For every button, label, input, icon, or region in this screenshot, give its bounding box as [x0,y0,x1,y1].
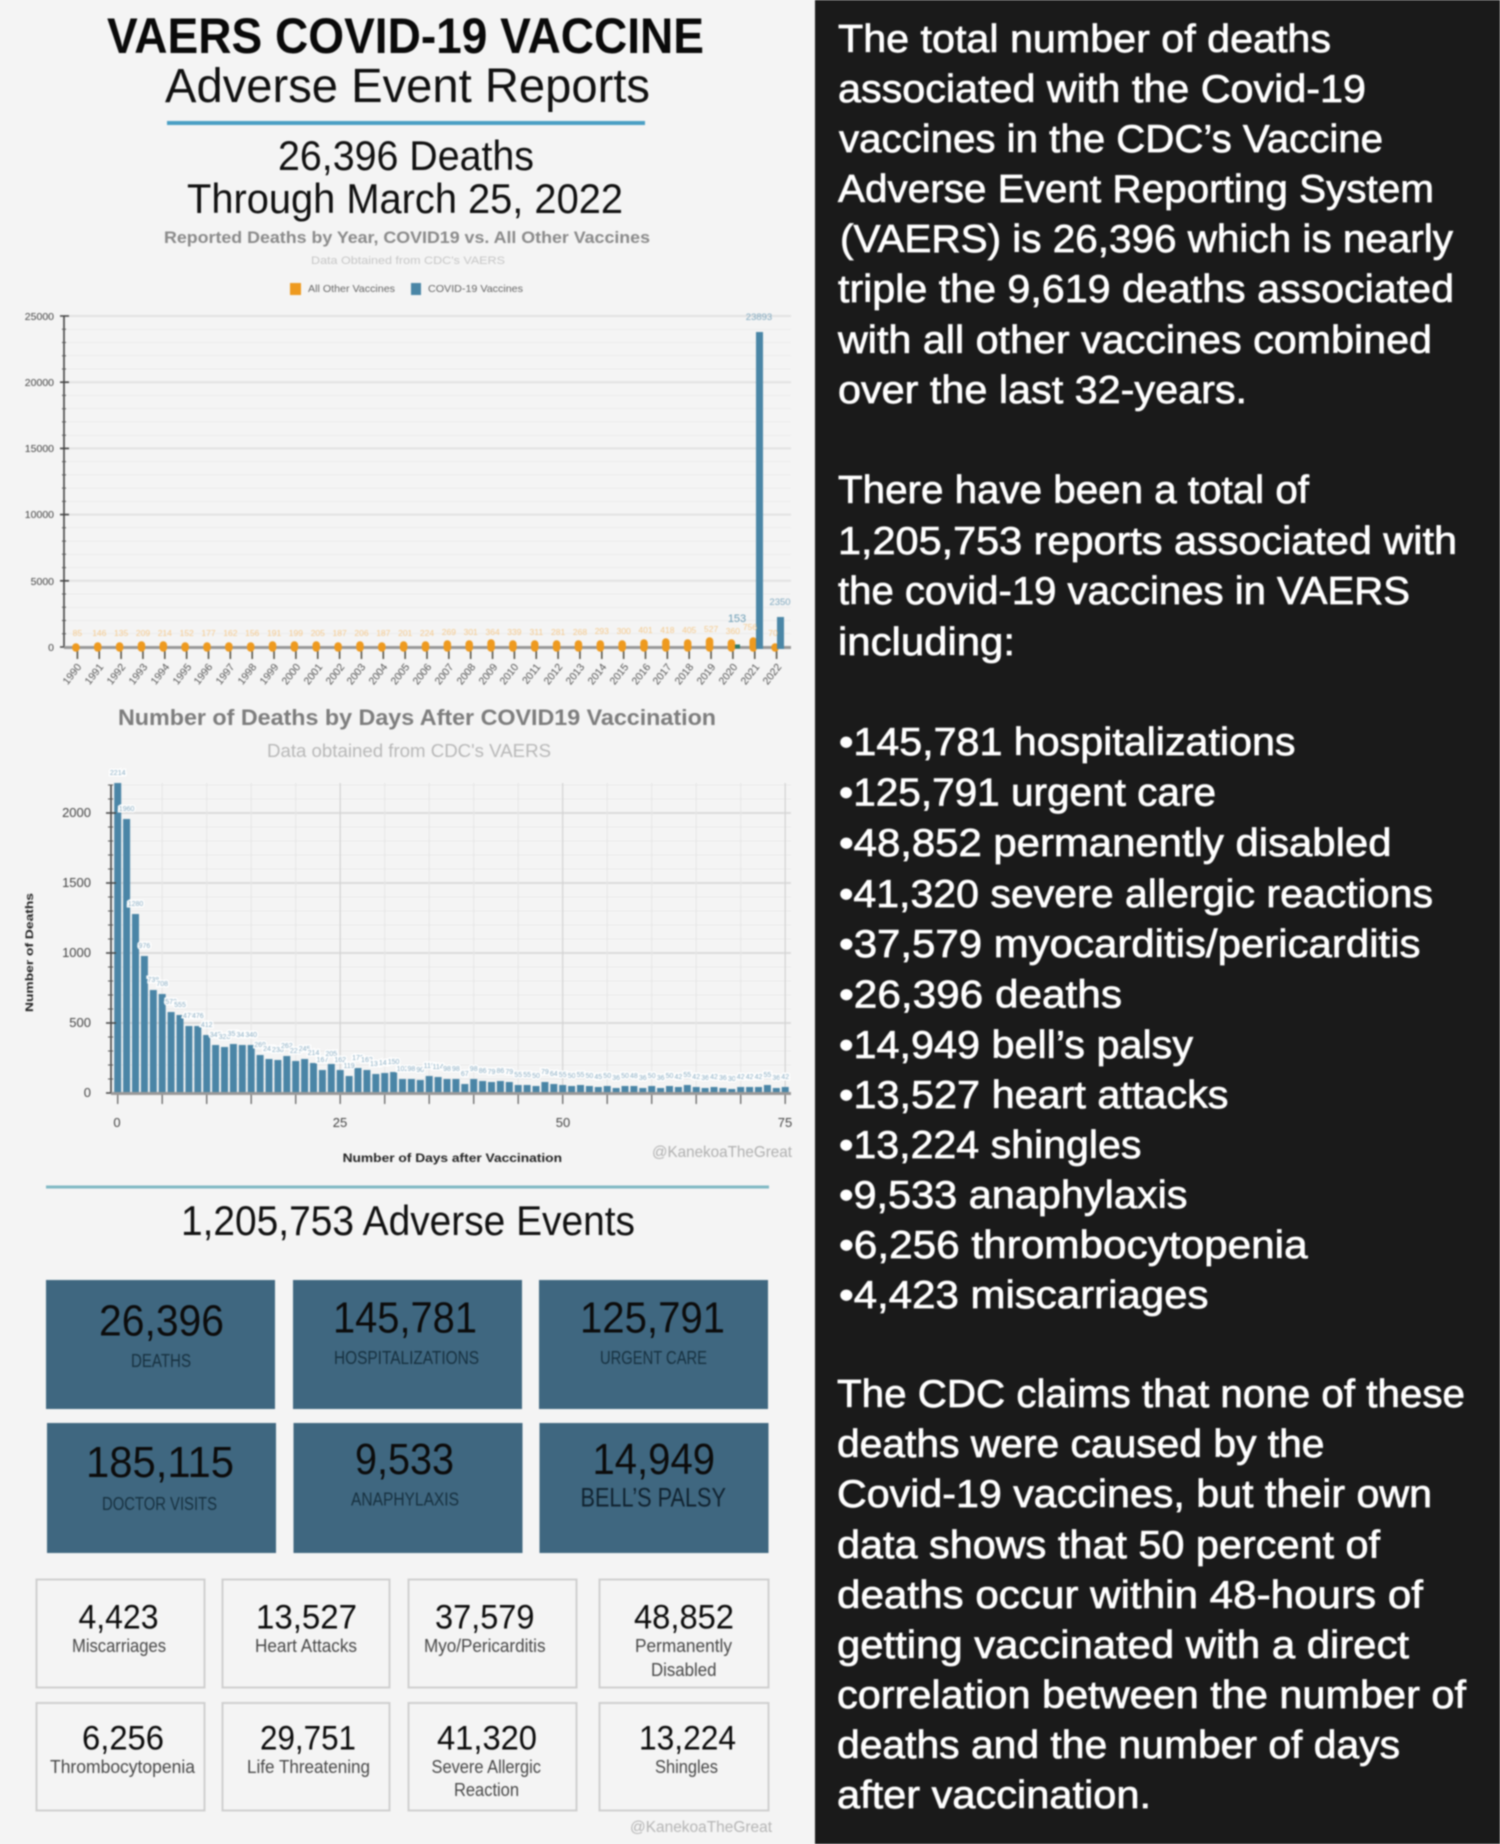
bar value labels: 162 [223,628,238,638]
tile: hospitalizations: 145,781 [333,1294,477,1342]
bar value labels: 85 [73,628,82,638]
chart: reported deaths by year [25,229,791,687]
text block: CDC claims: deaths and the number of days [837,1724,1400,1767]
text block: total deaths: The total number of deaths [838,18,1331,61]
bar value labels: 179 [352,1055,364,1062]
list: adverse event counts: •41,320 severe allergic reactions [839,873,1433,916]
bar value labels: 201 [398,628,413,638]
box: myo/pericarditis: 37,579 [435,1598,534,1636]
box: shingles: Shingles [655,1757,718,1777]
bar value labels: 162 [361,1057,373,1064]
x axis year labels: 2017 [651,661,674,687]
title rule [167,121,645,125]
x axis year labels: 2016 [630,661,653,687]
list: adverse event counts: •9,533 anaphylaxis [839,1174,1188,1217]
list: adverse event counts: •125,791 urgent care [839,772,1216,814]
bar value labels: 42 [746,1074,754,1081]
legend: COVID-19 Vaccines [428,283,523,295]
x axis year labels: 1991 [83,661,106,687]
bar value labels: 42 [710,1074,718,1081]
bars: all other vaccines [76,641,775,648]
bar value labels: 36 [772,1075,780,1082]
bar value labels: 205 [311,628,325,638]
text block: total reports: including: [838,621,1015,664]
x axis year labels: 1995 [171,661,194,687]
y axis: 20000 [25,377,54,389]
bar value labels: 114 [433,1064,444,1071]
box: myo/pericarditis: Myo/Pericarditis [424,1636,546,1656]
chart heading [118,705,716,761]
bar value labels: 50 [568,1073,576,1080]
text block: total deaths: triple the 9,619 deaths associated [838,268,1454,311]
bar value labels: 55 [523,1072,531,1079]
x axis: 50 [556,1115,570,1130]
x axis year labels: 2010 [498,661,521,687]
bar value labels: 50 [621,1073,629,1080]
box: heart attacks: Heart Attacks [255,1636,357,1656]
bar value labels: 70 [768,628,778,638]
x axis year labels: 1990 [61,661,84,687]
bar value labels: 269 [254,1042,266,1049]
bar value labels: 36 [612,1075,620,1082]
bar value labels: 45 [594,1074,602,1081]
y axis: 5000 [31,576,54,588]
box: thrombocytopenia: Thrombocytopenia [50,1757,196,1777]
bar value labels: 119 [344,1063,355,1070]
box: heart attacks: 13,527 [256,1598,357,1636]
title: VAERS COVID-19 VACCINE [107,8,704,64]
bar value labels: 301 [464,627,478,637]
tile: urgent care [539,1280,768,1409]
bar value labels: 48 [630,1073,638,1080]
box: severe allergic reaction: 41,320 [437,1720,537,1758]
bar value labels: 55 [559,1072,567,1079]
y axis [25,311,69,654]
x axis ticks [64,646,791,649]
bar value labels: 262 [281,1043,293,1050]
tile: urgent care: 125,791 [580,1294,725,1342]
bar value labels: 98 [452,1066,460,1073]
bar value labels: 90 [416,1067,424,1074]
legend: All Other Vaccines [308,283,395,295]
bar value labels: 177 [201,628,216,638]
bar value labels: 412 [201,1022,213,1029]
bar value labels: 2214 [110,770,126,777]
box: miscarriages: Miscarriages [72,1636,166,1656]
list: adverse event counts: •13,527 heart attacks [839,1074,1228,1117]
y axis [62,785,116,1100]
x axis year labels: 2021 [739,661,762,687]
bar value labels: 146 [92,628,107,638]
box: miscarriages [72,1598,166,1656]
bar value labels: 162 [334,1057,346,1064]
bar value labels: 187 [376,628,391,638]
bar value labels: 245 [263,1046,275,1053]
bar value labels: 555 [174,1002,186,1009]
x axis year labels: 2009 [477,661,500,687]
list: adverse event counts: •26,396 deaths [839,974,1122,1016]
list: adverse event counts [839,721,1433,1317]
bar value labels: 42 [755,1074,762,1081]
list: adverse event counts: •6,256 thrombocytopenia [839,1224,1308,1267]
text block: CDC claims: deaths occur within 48-hours of [837,1574,1423,1617]
box: severe allergic reaction [432,1720,541,1800]
bar value labels: 269 [442,627,456,637]
x axis year labels: 1996 [192,661,215,687]
x axis year labels: 1992 [105,661,128,687]
bar value labels: 64 [550,1071,558,1078]
list: adverse event counts: •14,949 bell’s palsy [839,1024,1194,1067]
text block: total deaths: Adverse Event Reporting System [838,168,1434,211]
x axis year labels: 2001 [302,661,325,687]
tile: bell's palsy [540,1423,768,1553]
x axis: 75 [778,1115,792,1130]
x axis: 25 [333,1115,347,1130]
box: myo/pericarditis [424,1598,546,1656]
panel: dark stat tiles [46,1280,768,1553]
bar value labels: 86 [479,1068,487,1075]
tile: anaphylaxis: ANAPHYLAXIS [351,1490,459,1510]
bar value labels: 293 [595,626,609,636]
bar value labels: 50 [586,1073,593,1080]
bar value labels: 42 [675,1074,682,1081]
chart heading: Reported Deaths by Year, COVID19 vs. All Other Vaccines [164,229,650,247]
bar value labels [73,312,791,638]
list: adverse event counts: •4,423 miscarriages [839,1274,1208,1317]
list: adverse event counts: •13,224 shingles [839,1124,1142,1167]
bar value labels: 340 [245,1032,257,1039]
box: thrombocytopenia: 6,256 [82,1720,164,1758]
bar value labels: 138 [370,1061,382,1068]
bar value labels: 187 [333,628,347,638]
bar value labels: 228 [290,1048,302,1055]
box: severe allergic reaction: Reaction [454,1780,519,1800]
bar value labels: 36 [701,1075,709,1082]
bar value labels: 36 [657,1075,665,1082]
chart heading: Number of Deaths by Days After COVID19 Vaccination [118,705,716,730]
text block: total deaths: with all other vaccines combined [837,319,1432,362]
x axis year labels: 1999 [258,661,281,687]
text block: total deaths: vaccines in the CDC’s Vaccine [839,118,1383,161]
tile: doctor visits: 185,115 [86,1438,234,1487]
chart heading [164,229,650,267]
x axis year labels: 2012 [542,661,565,687]
text block: CDC claims: Covid-19 vaccines, but their own [837,1473,1432,1516]
attribution: @KanekoaTheGreat [630,1819,773,1836]
y axis: 0 [84,1085,91,1100]
bar value labels: 191 [267,628,281,638]
bar value labels: 55 [683,1072,691,1079]
bar value labels: 1280 [128,901,143,908]
bar value labels: 756 [743,622,757,632]
x axis year labels [61,661,784,687]
bar value labels: 150 [388,1059,400,1066]
text block: CDC claims: correlation between the number of [837,1674,1466,1717]
bar value labels: 214 [158,628,172,638]
x axis year labels: 1993 [127,661,150,687]
bar value labels: 300 [617,626,631,636]
headline: deaths count and date: Through March 25, 2022 [187,175,623,222]
bar value labels: 708 [156,981,168,988]
tile: deaths: 26,396 [99,1296,224,1346]
x axis year labels: 2015 [608,661,631,687]
text block: total reports: There have been a total of [838,469,1309,512]
box: permanently disabled: 48,852 [634,1598,734,1636]
bar value labels: 50 [648,1073,656,1080]
bar value labels: 145 [379,1060,391,1067]
text block: total reports: 1,205,753 reports associated with [838,520,1457,563]
tile: deaths [46,1280,275,1409]
bar value labels: 98 [470,1066,478,1073]
section rule [46,1186,769,1188]
bar value labels: 360 [726,626,740,636]
bar value labels: 23893 [746,312,772,323]
x axis title: Number of Days after Vaccination [343,1151,562,1165]
bar value labels: 527 [704,624,718,634]
chart heading: Data Obtained from CDC's VAERS [311,255,505,267]
list: adverse event counts: •37,579 myocarditis/pericarditis [839,923,1420,966]
bar value labels: 245 [299,1046,311,1053]
x axis year labels: 2007 [433,661,456,687]
bars: COVID-19 vaccines [735,332,784,649]
x axis year labels: 2022 [761,661,784,687]
x axis year labels: 2000 [280,661,303,687]
tile: bell's palsy: 14,949 [592,1435,715,1484]
x axis: 0 [113,1115,121,1130]
chart heading: Data obtained from CDC's VAERS [267,740,551,761]
headline: deaths count and date [187,132,623,222]
box: heart attacks [255,1598,357,1656]
x axis year labels: 2020 [717,661,740,687]
bar value labels: 339 [507,627,522,637]
bar value labels: 42 [737,1074,745,1081]
headline: deaths count and date: 26,396 Deaths [278,132,534,179]
x axis year labels: 2013 [564,661,587,687]
bar value labels: 79 [488,1069,495,1076]
legend [290,283,523,295]
bar value labels: 42 [781,1074,789,1081]
bar value labels: 214 [308,1050,319,1057]
bar value labels: 268 [573,627,587,637]
box: life threatening: Life Threatening [247,1757,370,1777]
x axis [111,1094,792,1130]
bar value labels: 55 [577,1072,584,1079]
bar value labels: 102 [397,1066,408,1073]
bar value labels: 152 [180,628,194,638]
box: severe allergic reaction: Severe Allergic [432,1757,541,1777]
tile: anaphylaxis: 9,533 [355,1435,454,1484]
chart: deaths by days after vaccination [24,705,793,1165]
text block: CDC claims: getting vaccinated with a direct [837,1624,1409,1667]
text block: total deaths [837,18,1454,412]
x axis year labels: 2006 [411,661,434,687]
box: shingles: 13,224 [639,1720,736,1758]
y axis: 25000 [25,311,54,323]
bar value labels: 50 [603,1073,611,1080]
tile: doctor visits: DOCTOR VISITS [102,1494,217,1514]
x axis year labels: 2003 [345,661,368,687]
box: life threatening [247,1720,370,1777]
text block: total reports [838,469,1457,664]
x axis year labels: 2008 [455,661,478,687]
bar value labels: 476 [192,1013,204,1020]
x axis year labels: 2004 [367,661,390,687]
x axis year labels: 2002 [324,661,347,687]
bar value labels: 50 [532,1073,540,1080]
x axis year labels: 2018 [673,661,696,687]
text block: CDC claims: after vaccination. [837,1774,1151,1817]
text block: CDC claims: data shows that 50 percent of [837,1524,1380,1567]
tile: deaths: DEATHS [131,1351,191,1371]
bar value labels: 345 [210,1032,222,1039]
panel: dark text commentary [815,0,1500,1844]
list: adverse event counts: •48,852 permanently disabled [839,822,1392,865]
bar value labels: 738 [147,977,159,984]
bar value labels: 238 [272,1047,284,1054]
box: life threatening: 29,751 [260,1720,356,1758]
bar value labels: 98 [408,1066,415,1073]
bar value labels: 167 [317,1057,328,1064]
bar value labels: 578 [165,999,177,1006]
x axis year labels: 2005 [389,661,412,687]
text block: total deaths: (VAERS) is 26,396 which is nearly [840,218,1454,261]
bar value labels: 2350 [769,597,791,608]
bar value labels: 976 [139,943,150,950]
y axis: 500 [69,1015,91,1030]
bar value labels: 30 [728,1076,736,1083]
tile: doctor visits [47,1423,276,1553]
bar value labels: 199 [289,628,303,638]
bar value labels: 36 [639,1075,647,1082]
list: adverse event counts: •145,781 hospitalizations [839,721,1296,764]
bar value labels: 156 [245,628,260,638]
bar value labels: 311 [530,627,543,637]
bar value labels: 86 [497,1068,504,1075]
title [107,8,704,113]
y axis: 1000 [62,945,91,960]
tile: urgent care: URGENT CARE [600,1348,707,1368]
bar value labels: 352 [228,1031,239,1038]
text block: CDC claims [837,1373,1466,1817]
box: permanently disabled: Disabled [651,1660,716,1680]
text block: CDC claims: The CDC claims that none of these [837,1373,1465,1416]
x axis year labels: 2011 [520,661,543,687]
title: Adverse Event Reports [165,60,650,113]
bar value labels: 476 [183,1013,195,1020]
y axis: 0 [48,642,54,654]
bar value labels: 135 [114,628,128,638]
text block: CDC claims: deaths were caused by the [837,1423,1324,1466]
bar value labels [110,770,789,1083]
text block: total reports: the covid-19 vaccines in VAERS [838,570,1410,613]
bar value labels: 67 [461,1071,469,1078]
box: permanently disabled: Permanently [635,1636,732,1656]
bars: deaths per day [118,783,785,1093]
text block: total deaths: associated with the Covid-19 [838,68,1366,111]
x axis year labels: 2014 [586,661,609,687]
panel: outlined stat boxes [36,1580,768,1810]
bar value labels: 205 [325,1051,337,1058]
bar value labels: 206 [354,628,369,638]
box: shingles [639,1720,736,1777]
bar value labels: 55 [764,1072,771,1079]
attribution: @KanekoaTheGreat [652,1144,793,1161]
heading: adverse events total: 1,205,753 Adverse Events [181,1197,635,1244]
bar value labels: 98 [443,1066,451,1073]
tile: bell's palsy: BELL’S PALSY [580,1482,726,1512]
box: thrombocytopenia [50,1720,196,1777]
y axis title: Number of Deaths [24,893,36,1012]
bar value labels: 50 [666,1073,673,1080]
x axis year labels: 1998 [236,661,259,687]
bar value labels: 418 [660,625,675,635]
bar value labels: 345 [236,1032,248,1039]
x axis year labels: 2019 [695,661,718,687]
text block: total deaths: over the last 32-years. [838,369,1247,412]
bar value labels: 79 [505,1069,513,1076]
bar value labels: 42 [692,1074,700,1081]
bar value labels: 405 [682,625,697,635]
bar value labels: 119 [424,1063,435,1070]
bar value labels: 209 [136,628,150,638]
y axis: 1500 [62,875,91,890]
panel: infographic background [0,0,815,1844]
x axis year labels: 1994 [149,661,172,687]
tile: anaphylaxis [294,1423,522,1553]
bar value labels: 153 [728,613,746,625]
bar value labels: 364 [486,627,500,637]
y axis: 2000 [62,805,91,820]
bar value labels: 55 [514,1072,522,1079]
box: miscarriages: 4,423 [78,1598,158,1636]
bar value labels: 224 [420,628,434,638]
bar value labels: 401 [638,625,653,635]
box: permanently disabled [634,1598,734,1680]
y axis: 15000 [25,443,54,455]
bar value labels: 36 [719,1075,727,1082]
bar value labels: 1960 [119,806,134,813]
y axis: 10000 [25,509,54,521]
bar value labels: 328 [219,1034,230,1041]
bar value labels: 79 [541,1069,549,1076]
tile: hospitalizations [293,1280,522,1409]
tile: hospitalizations: HOSPITALIZATIONS [334,1348,479,1368]
bar value labels: 281 [551,627,565,637]
x axis year labels: 1997 [214,661,237,687]
